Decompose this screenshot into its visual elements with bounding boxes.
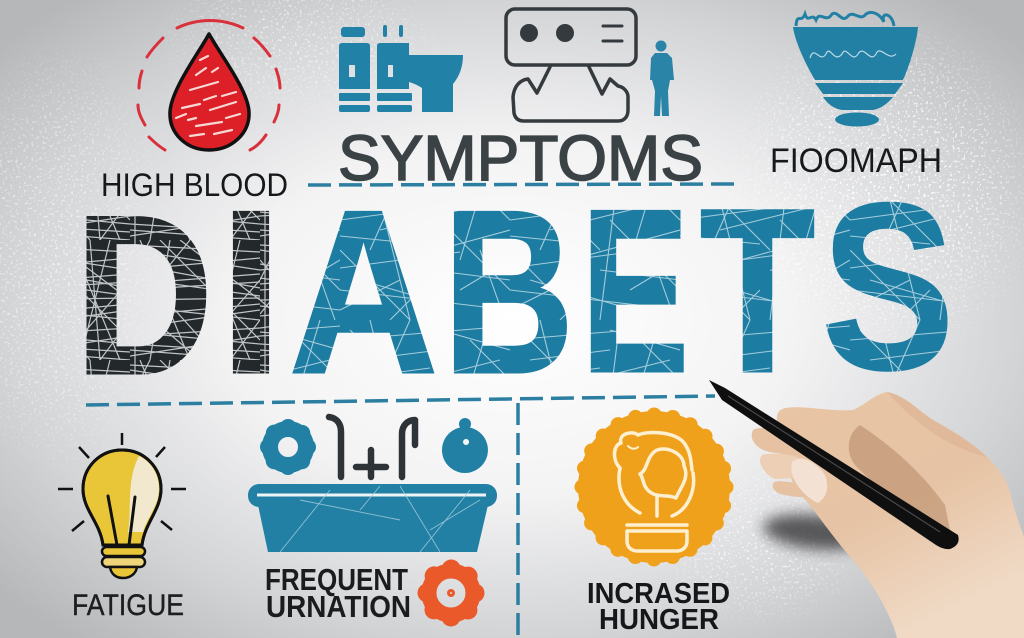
main title: diabets: S (822, 155, 954, 419)
heading: symptoms: SYMPTOMS (338, 122, 703, 194)
icon: ornament (442, 418, 488, 473)
icon: blood drop (138, 20, 280, 150)
main title: diabets (75, 155, 954, 422)
icon: orange flower (427, 569, 475, 617)
main title: diabets: A (289, 163, 438, 422)
divider: vertical dashed line (516, 403, 520, 638)
icon: person (650, 40, 674, 116)
label: frequent urnation: URNATION (266, 589, 411, 624)
label: high blood: HIGH BLOOD (101, 167, 288, 203)
main title: diabets: I (219, 163, 283, 422)
icon: bottles and toilet (339, 25, 463, 112)
label: frequent urnation: FREQUENT (265, 562, 408, 597)
label: fioomaph: FIOOMAPH (770, 142, 942, 180)
divider: lower horizontal dashed line (86, 396, 715, 405)
label: increased hunger: HUNGER (599, 604, 719, 636)
icon: hunger badge (578, 411, 730, 563)
icon: blue flower (268, 428, 308, 466)
icon: hooks and plus (329, 417, 415, 477)
main title: diabets: T (700, 161, 815, 421)
icon: tub (248, 484, 497, 552)
icon: light bulb (58, 433, 186, 578)
icon: bowl (793, 12, 918, 127)
hand shadow (762, 510, 868, 554)
main title: diabets: B (443, 163, 574, 422)
label: frequent urnation (265, 562, 411, 624)
label: increased hunger: INCRASED (587, 578, 730, 610)
icon: monitor with cloud speech (506, 9, 636, 121)
main title: diabets: D (75, 168, 213, 421)
divider: symptoms dashed line (308, 184, 737, 185)
hand holding pen (709, 380, 1024, 638)
main title: diabets: E (581, 162, 689, 421)
label: increased hunger (587, 578, 730, 636)
label: fatigue: FATIGUE (72, 589, 184, 622)
